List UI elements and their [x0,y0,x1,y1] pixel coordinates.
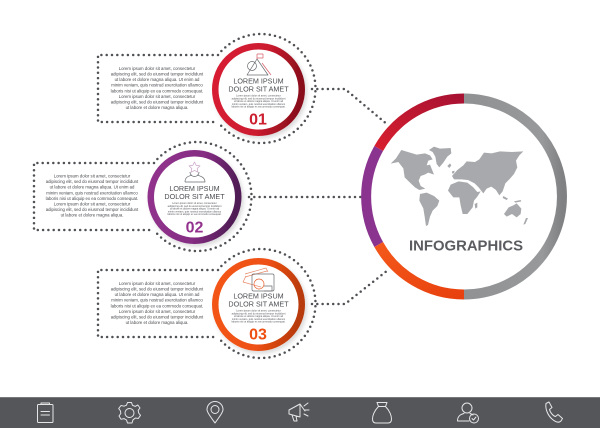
small text: laboris nisi ut aliquip ex ea commodo consequat. [232,321,286,324]
description text: ut labore et dolore magna aliqua. Ut enim ad [50,185,135,190]
description text: laboris nisi ut aliquip ex ea commodo consequat. [111,88,203,93]
heading: LOREM IPSUM [233,292,284,300]
description text: adipiscing elit, sed do eiusmod tempor incididunt [111,287,204,292]
heading: DOLOR SIT AMET [164,192,225,201]
icon: telephone [546,402,562,422]
small text: adipiscing elit, sed do eiusmod tempor incididunt [168,205,222,208]
description text: ut labore et dolore magna aliqua. Ut enim ad [115,292,200,297]
description text: ut labore et dolore magna aliqua. [126,320,188,325]
description text: Lorem ipsum dolor sit amet, consectetur [119,66,196,71]
step 03 group [98,249,315,358]
small text: ut labore et dolore magna aliqua. Ut enim ad [170,208,220,211]
connector: step 01 to main circle [312,89,388,125]
heading: DOLOR SIT AMET [228,84,289,94]
heading [228,292,289,308]
small text: ut labore et dolore magna aliqua. Ut enim ad [234,100,284,103]
description text: Lorem ipsum dolor sit amet, consectetur [54,174,131,178]
connector: step 03 to main circle [312,270,388,304]
icon: money bag [372,402,392,423]
badge ring [212,258,305,351]
description text: Lorem ipsum dolor sit amet, consectetur [54,202,131,206]
ring segment: red [379,98,464,148]
icon: user check [458,403,478,423]
small text [232,94,286,109]
badge ring [212,43,305,136]
icon: map pin [207,402,223,423]
description text: adipiscing elit, sed do eiusmod tempor incididunt [111,314,204,319]
description text: adipiscing elit, sed do eiusmod tempor incididunt [111,99,204,104]
icon: mountain flag [247,54,271,75]
number 01: 01 [249,112,267,128]
description text: Lorem ipsum dolor sit amet, consectetur [119,94,196,99]
description text: Lorem ipsum dolor sit amet, consectetur [119,309,196,314]
small text: laboris nisi ut aliquip ex ea commodo consequat. [232,106,286,109]
small text [232,310,286,324]
description text [111,281,204,325]
dotted outline [98,34,315,143]
description text: minim veniam, quis nostrud exercitation ullamco [111,83,203,88]
description text: minim veniam, quis nostrud exercitation ullamco [46,190,138,195]
icon: cards and coin [243,268,274,291]
description text: Lorem ipsum dolor sit amet, consectetur [119,281,196,286]
description text: minim veniam, quis nostrud exercitation ullamco [111,298,203,303]
heading: DOLOR SIT AMET [228,300,289,308]
dotted outline [34,142,251,251]
step 01 group [98,34,315,143]
small text: adipiscing elit, sed do eiusmod tempor incididunt [232,312,286,315]
small text: minim veniam, quis nostrud exercitation ullamco [232,318,286,321]
badge ring [148,150,242,244]
icon: person with star [185,162,205,182]
description text: adipiscing elit, sed do eiusmod tempor incididunt [111,72,204,77]
heading: LOREM IPSUM [169,184,220,193]
number 03: 03 [249,326,267,344]
heading: LOREM IPSUM [233,76,284,86]
ring segment: orange [379,244,464,294]
description text: adipiscing elit, sed do eiusmod tempor incididunt [46,207,139,212]
description text: adipiscing elit, sed do eiusmod tempor incididunt [46,179,139,184]
ring segment: grey [464,98,562,294]
dotted outline [98,249,315,358]
footer icon bar [0,397,600,428]
description text: ut labore et dolore magna aliqua. Ut enim ad [115,77,200,82]
small text: Lorem ipsum dolor sit amet, consectetur [236,310,281,312]
main circle [366,98,562,294]
small text: laboris nisi ut aliquip ex ea commodo consequat. [168,213,222,216]
description text [46,174,139,218]
description text: laboris nisi ut aliquip ex ea commodo consequat. [111,303,203,308]
small text: minim veniam, quis nostrud exercitation ullamco [232,103,286,106]
heading [228,76,289,94]
small text: ut labore et dolore magna aliqua. Ut enim ad [234,315,284,318]
connector: step 02 to main circle [249,196,361,198]
small text: adipiscing elit, sed do eiusmod tempor incididunt [232,97,286,100]
icon: megaphone [289,403,309,421]
description text [111,66,204,110]
small text: minim veniam, quis nostrud exercitation ullamco [168,210,222,213]
description text: ut labore et dolore magna aliqua. [126,105,188,110]
small text: Lorem ipsum dolor sit amet, consectetur [236,94,281,98]
number 02: 02 [186,220,204,236]
heading [164,184,225,201]
icon: gear [119,402,140,423]
world map [391,147,528,226]
description text: ut labore et dolore magna aliqua. [61,213,123,218]
ring segment: purple [366,148,379,244]
icon: clipboard [38,403,53,422]
small text [168,202,222,216]
step 02 group [34,142,251,251]
description text: laboris nisi ut aliquip ex ea commodo consequat. [46,196,138,201]
small text: Lorem ipsum dolor sit amet, consectetur [172,202,217,205]
main title: INFOGRAPHICS [409,238,523,255]
